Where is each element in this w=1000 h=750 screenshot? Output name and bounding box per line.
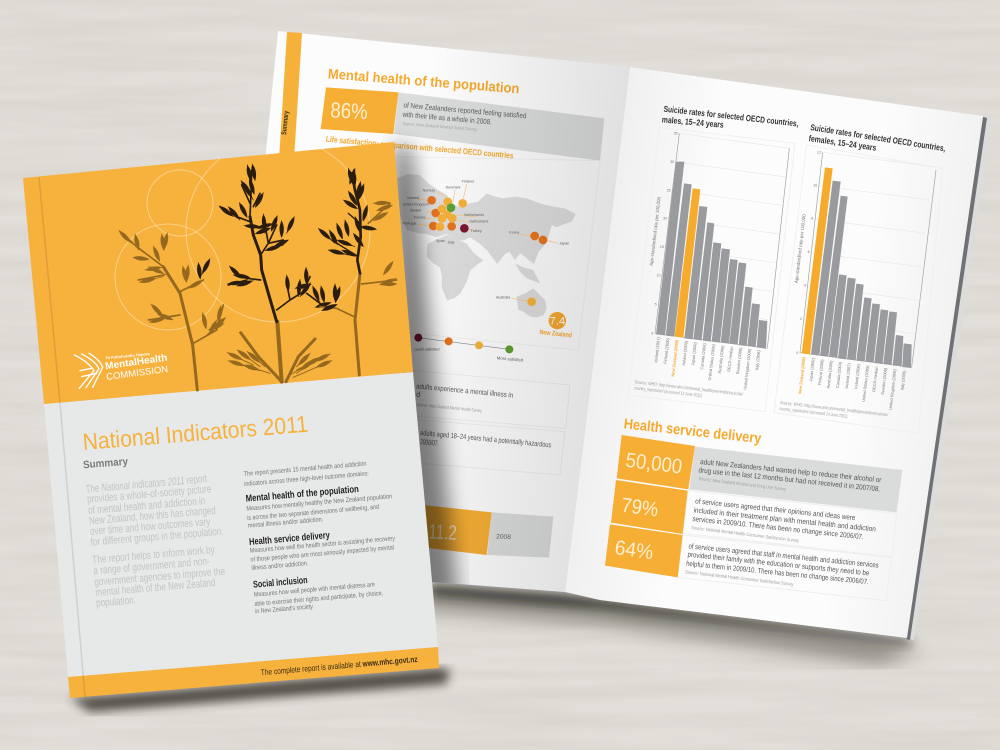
- country labels: males: Ireland (2009): [681, 340, 689, 366]
- highlighted bar: New Zealand males: [675, 188, 700, 338]
- cover title: National Indicators 2011: [82, 411, 309, 455]
- stat panel: 86%: Source: New Zealand General Social Survey: [402, 121, 478, 132]
- y axis: males: 25: [667, 188, 671, 192]
- y axis: males: Age-standardised rate per 100,000: [649, 196, 662, 266]
- stat panel: 86%: with their life as a whole in 2008.: [401, 110, 492, 126]
- logo mark: [74, 353, 103, 388]
- cover footer band: [68, 647, 439, 698]
- country labels: females: Iceland (2007): [844, 362, 852, 389]
- stat panel: 79%: included in their treatment plan with mental health and addiction: [693, 505, 876, 533]
- cover sheet: [44, 372, 438, 677]
- map heading: Life satisfaction: comparison with selected OECD countries: [325, 134, 514, 160]
- bars: females: [811, 181, 912, 368]
- right plant dark crown: [332, 173, 361, 273]
- dark tips on left plant: [198, 259, 210, 277]
- stat panel: 86%: 86%: [330, 97, 368, 124]
- cover intro paragraphs: for different groups in the population.: [90, 526, 224, 549]
- cover intro paragraphs: New Zealand, how this has changed: [89, 505, 216, 527]
- y axis: females: 6: [808, 250, 810, 254]
- cover spine crease: [39, 177, 85, 697]
- y axis: females: 2: [800, 317, 802, 321]
- y axis: males: [649, 132, 678, 336]
- country labels: females: Japan (2009): [808, 357, 816, 382]
- country labels: females: United Kingdom (2009): [888, 368, 897, 410]
- country labels: males: OECD median: [726, 346, 734, 372]
- cover intro paragraphs: mental health of the New Zealand: [95, 577, 216, 599]
- statement: mental illness: [416, 381, 514, 413]
- country labels: males: Australia (2006): [717, 345, 725, 374]
- satisfaction legend: Most satisfied: [497, 355, 524, 363]
- cover intro paragraphs: over time and how outcomes vary: [90, 516, 211, 538]
- stat panel: 50,000: adult New Zealanders had wanted help to reduce their alcohol or: [700, 457, 882, 484]
- New Zealand marker: [539, 312, 572, 339]
- country labels: females: Sweden (2008): [880, 367, 888, 395]
- country labels: males: United States (2005): [707, 343, 716, 381]
- y axis: females: 10: [813, 183, 817, 187]
- country labels: Korea: [509, 230, 520, 234]
- left plant: [120, 232, 223, 390]
- source: females: country_reports/en/ (accessed 14 June 2011): [779, 406, 848, 419]
- chart: females: [774, 122, 946, 433]
- cover domains column: Measures how well the health sector is assisting the recovery: [250, 535, 396, 555]
- cover intro paragraphs: The National Indicators 2011 report: [85, 473, 207, 496]
- statement: hazardous drinking: adults aged 18–24 years had a potentially hazardous: [420, 428, 552, 449]
- spine label: Summary: [281, 111, 291, 135]
- country labels: Australia: [496, 296, 511, 300]
- stat panel: 50,000: Source: New Zealand Alcohol and Drug Use Survey: [698, 476, 787, 492]
- country labels: females: Canada (2004): [835, 361, 843, 389]
- country labels: males: Japan (2009): [690, 341, 698, 366]
- cover intro paragraphs: of mental health and addiction in: [88, 495, 206, 517]
- source: females: Source: WHO: http://www.who.int/mental_health/prevention/suicide/: [780, 400, 889, 417]
- country labels: males: United Kingdom (2009): [742, 348, 752, 390]
- gridlines: males: [658, 133, 789, 320]
- y axis: males: 30: [670, 160, 674, 164]
- cover domains column: mental illness and/or addiction.: [248, 516, 324, 530]
- statement panel frames: [678, 491, 897, 601]
- y axis: males: 35: [674, 132, 678, 136]
- heading: health service delivery: Health service delivery: [623, 416, 763, 447]
- open report: [245, 31, 992, 640]
- stat panel: 86%: [321, 87, 604, 161]
- page stack edge: [907, 117, 992, 640]
- chart: males: [628, 104, 799, 412]
- country labels: Turkey: [471, 229, 482, 233]
- country labels: females: [797, 356, 907, 410]
- cover domains column: The report presents 15 mental health and addiction: [244, 460, 367, 478]
- country labels: [403, 180, 569, 300]
- statement: mental illness: Source: New Zealand Mental Health Survey: [417, 402, 483, 413]
- country labels: males: Sweden (2008): [735, 347, 743, 375]
- country labels: France: [414, 216, 425, 220]
- heading: mental health: Mental health of the population: [327, 65, 520, 96]
- page edge dark line: [906, 117, 987, 640]
- country labels: females: Finland (2009): [817, 359, 825, 385]
- country labels: females: OECD median: [871, 366, 879, 392]
- country labels: males: New Zealand (2008): [670, 339, 679, 377]
- country labels: Switzerland: [469, 220, 488, 224]
- statement: mental illness: d: [416, 390, 421, 399]
- stat panel: 64%: 64%: [613, 536, 655, 564]
- country labels: Ireland: [410, 208, 421, 212]
- country labels: males: Iceland (2007): [653, 336, 661, 363]
- stat panel: 64%: helpful to them in 2009/10. There has been no change since 2006/07.: [686, 559, 869, 586]
- flax plants illustration: [74, 164, 397, 390]
- stat panel: 50,000: drug use in the last 12 months but had not received it in 2007/08.: [698, 465, 881, 493]
- country labels: females: Ireland (2009): [853, 363, 861, 389]
- cover intro paragraphs: population.: [96, 594, 136, 610]
- left page shading: [245, 31, 630, 592]
- country labels: Portugal: [403, 221, 416, 225]
- brochure shadow: [420, 584, 918, 662]
- country labels: Spain: [436, 239, 445, 243]
- New Zealand marker: 7.4: [549, 316, 565, 328]
- country markers: [427, 196, 547, 306]
- cover domains column: indicators across three high-level outcome domains:: [244, 470, 369, 488]
- country labels: Japan: [559, 242, 569, 246]
- stat panel: 86%: of New Zealanders reported feeling satisfied: [403, 100, 527, 120]
- source: males: Source: WHO: http://www.who.int/mental_health/prevention/suicide/: [635, 379, 744, 397]
- decorative circles: [115, 138, 370, 330]
- country labels: females: Italy (2006): [899, 370, 907, 391]
- statement: mental illness: adults experience a mental illness in: [416, 381, 514, 400]
- satisfaction legend: [414, 334, 524, 363]
- bars: males: [656, 162, 767, 349]
- country labels: males: Italy (2006): [754, 349, 761, 370]
- left page content: [321, 65, 604, 350]
- world map: [397, 174, 576, 317]
- satisfaction legend: Least satisfied: [414, 347, 439, 352]
- left page: [245, 31, 630, 592]
- cover domains column: Measures how mentally healthy the New Zealand population: [246, 493, 393, 513]
- cover domains column: Mental health of the population: [245, 484, 359, 505]
- y axis: females: Age-standardised rate per 100,000: [794, 214, 807, 283]
- map panel frame: [380, 157, 600, 350]
- country labels: Finland: [462, 180, 474, 184]
- cover domains column: able to exercise their rights and participate, by choice,: [254, 590, 383, 608]
- cover intro paragraphs: a range of government and non-: [93, 556, 210, 577]
- cover domains column: in New Zealand's society.: [255, 603, 314, 615]
- stat panel: 50,000: [617, 435, 902, 512]
- country labels: Norway: [423, 189, 435, 193]
- chart title: females: females, 15–24 years: [808, 133, 877, 153]
- y axis: females: 0: [796, 351, 798, 355]
- stat panel: 11.2: 2008: [496, 533, 511, 541]
- stat panel: 79%: 79%: [620, 494, 660, 521]
- cover intro paragraphs: provides a whole-of-society picture: [87, 483, 212, 506]
- logo text: MentalHealth: [105, 353, 168, 372]
- cover orange panel: [23, 142, 413, 404]
- gridlines: females: [804, 152, 934, 334]
- cover shadow on table: [70, 668, 450, 712]
- health service delivery section: [605, 416, 902, 601]
- cover domains column: Social inclusion: [253, 575, 308, 591]
- right page: [565, 67, 983, 638]
- stat panel: 79%: services in 2009/10. There has been no change since 2006/07.: [692, 514, 864, 541]
- statement panels: [400, 369, 570, 475]
- stat panel: 79%: [611, 480, 876, 543]
- cover intro paragraphs: [85, 473, 225, 610]
- chart title: females: [808, 122, 946, 153]
- logo text: Te Kaitohutohu Hauora: [105, 351, 151, 360]
- logo text: [105, 351, 169, 382]
- stat panel: 11.2: 11.2: [428, 520, 457, 545]
- chart title: males: Suicide rates for selected OECD countries,: [663, 104, 799, 129]
- cover domains column: of those people who are most seriously impacted by mental: [250, 544, 395, 564]
- y axis: females: 12: [817, 150, 821, 154]
- cover subtitle: Summary: [83, 456, 128, 471]
- y axis: females: 4: [804, 284, 806, 288]
- country labels: males: [653, 336, 761, 390]
- cover domains column: is across the two separate dimensions of wellbeing, and: [247, 504, 380, 522]
- y axis: females: [794, 150, 821, 355]
- cover footer text: The complete report is available at www.mhc.govt.nz: [260, 654, 418, 677]
- statement: hazardous drinking: 2006/07.: [420, 437, 439, 448]
- chart title: males: males, 15–24 years: [661, 114, 724, 130]
- left plant leaves: [119, 231, 226, 335]
- country labels: females: Australia (2006): [825, 360, 834, 389]
- cover text: [82, 411, 418, 677]
- source: males: country_reports/en/ (accessed 14 June 2011): [634, 385, 703, 398]
- stat panel: 64%: [605, 524, 879, 587]
- country labels: females: United States (2005): [861, 365, 870, 402]
- country labels: Iceland: [407, 196, 419, 200]
- statement: hazardous drinking: [420, 428, 552, 449]
- marker leader lines: [417, 184, 558, 301]
- middle plant dark crown: [220, 170, 330, 322]
- country labels: Denmark: [446, 185, 461, 189]
- cover domains column: Measures how well people with mental distress are: [254, 581, 375, 599]
- New Zealand marker: New Zealand: [539, 329, 572, 339]
- stat panel: 64%: of service users agreed that staff in mental health and addiction services: [688, 541, 879, 570]
- stat panel: 79%: Source: National Mental Health Consumer Satisfaction Survey: [691, 525, 800, 543]
- y axis: males: 0: [651, 332, 653, 336]
- stat panel: 11.2: [417, 504, 553, 558]
- right plant lower stem and leaves: [320, 203, 397, 375]
- cover intro paragraphs: The report helps to inform work by: [92, 544, 216, 566]
- chart title: females: Suicide rates for selected OECD countries,: [810, 122, 946, 153]
- y axis: males: 15: [660, 245, 664, 249]
- cover shadow on report: [390, 142, 462, 668]
- cover domains column: Health service delivery: [249, 530, 331, 548]
- country labels: males: Finland (2009): [662, 337, 670, 364]
- country labels: Italy: [448, 240, 455, 244]
- y axis: males: 5: [655, 302, 657, 306]
- logo text: COMMISSION: [106, 364, 169, 382]
- y axis: males: 20: [663, 217, 667, 221]
- stat panel: 79%: of service users agreed that their opinions and ideas were: [695, 496, 856, 522]
- chart frame: males: [628, 127, 795, 412]
- axes: females: [800, 152, 936, 367]
- chart title: males: [661, 104, 799, 130]
- y axis: males: 10: [657, 273, 661, 277]
- cover intro paragraphs: government agencies to improve the: [94, 566, 225, 589]
- highlighted bar: New Zealand females: [802, 167, 833, 354]
- country labels: males: Canada (2004): [699, 342, 707, 370]
- middle plant lower stem and leaves: [241, 322, 315, 382]
- stat panel: 64%: Source: National Mental Health Consumer Satisfaction Survey: [685, 569, 794, 587]
- axes: males: [655, 133, 789, 348]
- y axis: females: 8: [811, 216, 813, 220]
- spine strip: [279, 32, 302, 160]
- country labels: Netherlands: [464, 213, 484, 217]
- stat panel: 64%: provided their family with the education or supports they need to be: [687, 550, 870, 577]
- charts: [628, 104, 946, 433]
- logo: Mental Health Commission: [74, 351, 169, 388]
- cover domains column: illness and/or addiction.: [251, 560, 309, 572]
- country labels: females: New Zealand (2008): [797, 356, 806, 394]
- chart frame: females: [774, 145, 943, 433]
- right page shading: [565, 67, 983, 638]
- country labels: United Kingdom: [403, 202, 429, 206]
- report cover: [23, 138, 439, 698]
- right page far shading: [565, 67, 983, 638]
- cover domains column: [244, 460, 396, 615]
- stat panel: 50,000: 50,000: [624, 449, 683, 479]
